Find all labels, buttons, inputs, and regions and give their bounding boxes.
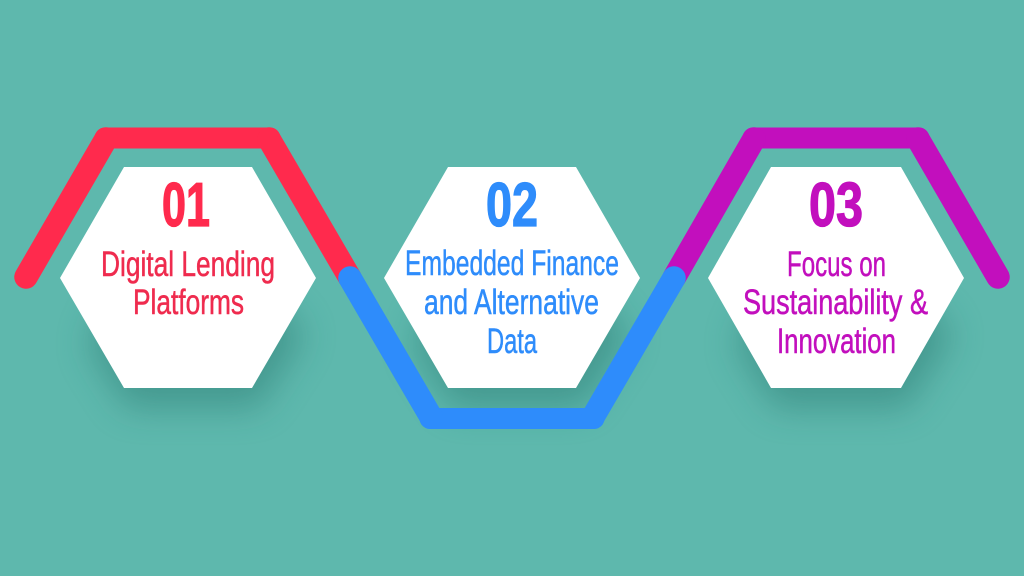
hexagon shadow 2 [413, 290, 630, 408]
label 3: Focus on [787, 245, 886, 284]
panel: step 1 [26, 138, 350, 408]
panel: step 2 [350, 167, 674, 418]
connector: purple [674, 138, 998, 278]
label 2 [405, 244, 619, 361]
label 3: Sustainability & [743, 283, 928, 322]
hexagon shadow 3 [736, 290, 953, 408]
number 01: 01 [162, 171, 210, 240]
hexagon 2 [384, 167, 640, 388]
hexagon 1 [60, 167, 316, 388]
label 2: Embedded Finance [405, 244, 619, 283]
label 2: and Alternative [424, 283, 599, 322]
label 1: Digital Lending [101, 245, 275, 284]
number 02: 02 [486, 171, 538, 240]
number 03: 03 [809, 171, 863, 240]
connector: blue [350, 278, 674, 418]
label 2: Data [487, 322, 537, 361]
hexagon 3 [708, 167, 964, 388]
label 3 [743, 245, 928, 361]
hexagon shadow 1 [88, 290, 305, 408]
panel: step 3 [674, 138, 998, 408]
connector: red [26, 138, 350, 278]
label 1 [101, 245, 275, 322]
label 1: Platforms [133, 283, 244, 322]
label 3: Innovation [777, 322, 896, 361]
